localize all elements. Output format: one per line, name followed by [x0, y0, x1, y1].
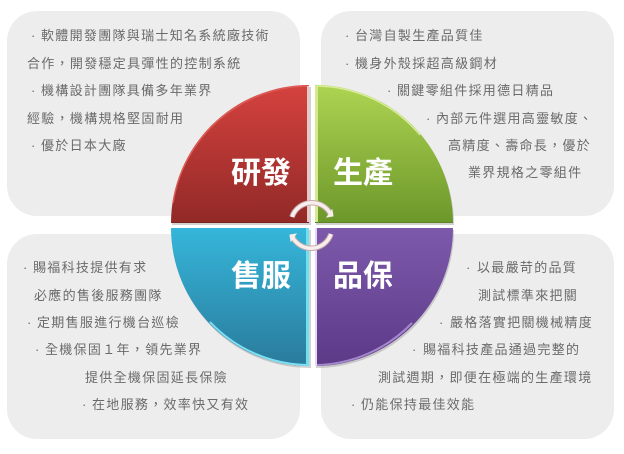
heading: 品保: 品保	[333, 260, 393, 293]
text block: after-sales service points: 必應的售後服務團隊	[34, 288, 163, 303]
text block: quality assurance points: 測試週期，即便在極端的生產環境	[378, 370, 593, 385]
text block: production points: ·	[387, 83, 391, 98]
text block: research and development points: 經驗，機構規格堅固耐用	[27, 111, 184, 126]
quadrant: green	[315, 85, 454, 225]
text block: production points: 高精度、壽命長，優於	[448, 138, 591, 153]
text block: quality assurance points	[351, 260, 593, 412]
heading: 生產: 生產	[333, 157, 393, 190]
icon: bottom cycle arrow	[290, 234, 331, 248]
text block: production points: 台灣自製生產品質佳	[355, 28, 484, 43]
panel: research and development	[7, 11, 300, 216]
text block: after-sales service points: ·	[82, 397, 86, 412]
text block: production points: 關鍵零組件採用德日精品	[397, 83, 554, 98]
text block: after-sales service points: 賜福科技提供有求	[33, 260, 147, 275]
panel: production	[321, 11, 614, 216]
text block: after-sales service points: 定期售服進行機台巡檢	[37, 315, 180, 330]
text block: quality assurance points: 以最嚴苛的品質	[477, 260, 577, 275]
text block: production points: ·	[426, 111, 430, 126]
text block: research and development points: 合作，開發穩定具彈性的控制系統	[27, 56, 242, 71]
text block: quality assurance points: 仍能保持最佳效能	[361, 397, 475, 412]
icon: top cycle arrow	[292, 203, 333, 217]
text block: production points: 內部元件選用高靈敏度、	[436, 111, 593, 126]
text block: quality assurance points: 賜福科技產品通過完整的	[423, 342, 580, 357]
text block: research and development points: 軟體開發團隊與瑞士知名系統廠技術	[41, 28, 270, 43]
text block: after-sales service points: ·	[27, 315, 31, 330]
panel: quality assurance	[321, 234, 614, 439]
text block: research and development points: ·	[31, 138, 35, 153]
text block: research and development points	[27, 28, 270, 153]
text block: after-sales service points: 全機保固１年，領先業界	[45, 342, 202, 357]
text block: after-sales service points: ·	[35, 342, 39, 357]
quadrant: purple	[315, 228, 454, 368]
text block: research and development points: 優於日本大廠	[41, 138, 127, 153]
text block: quality assurance points: ·	[351, 397, 355, 412]
text block: quality assurance points: 嚴格落實把關機械精度	[450, 315, 593, 330]
heading: 售服: 售服	[231, 260, 291, 293]
text block: production points: ·	[345, 56, 349, 71]
text block: quality assurance points: ·	[412, 342, 416, 357]
heading: 研發: 研發	[231, 157, 291, 190]
text block: production points: ·	[345, 28, 349, 43]
text block: production points: 機身外殼採超高級鋼材	[355, 56, 498, 71]
text block: production points	[345, 28, 593, 180]
text block: research and development points: 機構設計團隊具備多年業界	[41, 83, 213, 98]
text block: after-sales service points: 提供全機保固延長保險	[85, 370, 228, 385]
text block: after-sales service points: ·	[23, 260, 27, 275]
quadrant: blue	[171, 228, 311, 368]
text block: research and development points: ·	[31, 28, 35, 43]
text block: quality assurance points: ·	[466, 260, 470, 275]
quadrant: red	[171, 85, 311, 225]
text block: quality assurance points: 測試標準來把關	[478, 288, 578, 303]
text block: after-sales service points	[23, 260, 249, 412]
text block: research and development points: ·	[31, 83, 35, 98]
panel: after-sales service	[7, 234, 300, 439]
text block: after-sales service points: 在地服務，效率快又有效	[92, 397, 249, 412]
text block: production points: 業界規格之零組件	[468, 165, 582, 180]
text block: quality assurance points: ·	[439, 315, 443, 330]
